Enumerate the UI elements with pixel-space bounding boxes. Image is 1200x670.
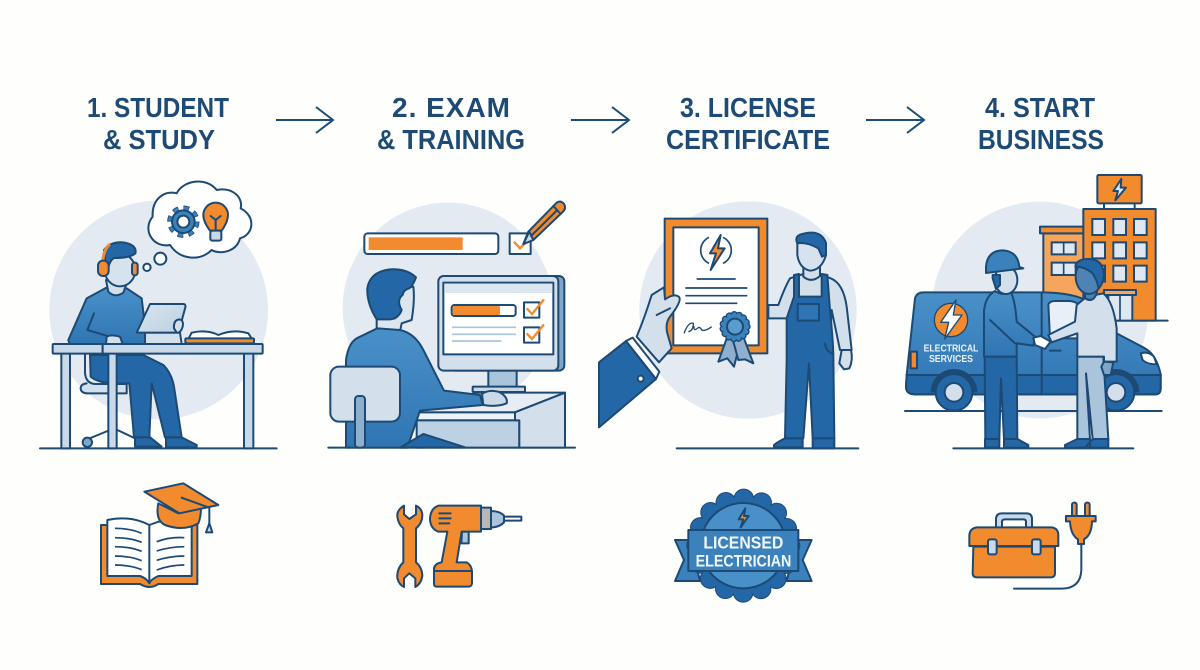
lightbulb icon: [203, 203, 228, 241]
ribbon seal: [718, 315, 753, 367]
van lettering: SERVICES: [929, 354, 973, 365]
handshake: [1033, 336, 1051, 349]
icon: wrench and drill: [397, 506, 521, 587]
chair: [81, 353, 135, 447]
ribbon ends: [675, 540, 812, 581]
hand holding certificate: [599, 287, 680, 427]
thought bubble with gear and lightbulb: [143, 182, 251, 271]
tablet: [137, 304, 185, 344]
certificate: [665, 219, 767, 353]
heading: step 2: 2. EXAM: [392, 92, 510, 123]
heading: step 3: CERTIFICATE: [666, 124, 830, 155]
heading: step 1: & STUDY: [103, 124, 215, 155]
heading: step 4: 4. START: [985, 92, 1095, 123]
computer monitor: [438, 276, 564, 392]
heading: step 4: BUSINESS: [978, 124, 1104, 155]
icon: licensed electrician badge: ELECTRICIAN: [696, 552, 791, 571]
heading: step 3: [666, 92, 830, 155]
gear icon: [170, 208, 197, 235]
progress bar: [364, 233, 498, 254]
scene: license certificate handed to worker: [599, 201, 858, 448]
desk: [417, 393, 565, 448]
torso: [68, 287, 147, 345]
van lettering: ELECTRICAL: [924, 343, 978, 354]
arrow: step 3 to 4: [866, 107, 924, 133]
head and headphones: [98, 242, 138, 295]
heading: step 2: & TRAINING: [377, 124, 525, 155]
van lettering: [924, 343, 978, 365]
heading: step 1: 1. STUDENT: [87, 92, 229, 123]
icon: toolbox with plug: [969, 503, 1096, 589]
legs: [90, 355, 197, 447]
office chair: [330, 367, 400, 448]
heading: step 4: [978, 92, 1104, 155]
scene: exam and training at computer: [328, 202, 575, 448]
icon: book with graduation cap: [101, 483, 218, 587]
office buildings with sign: [1040, 175, 1156, 321]
checkbox with pencil: [510, 202, 565, 254]
heading: step 1: [87, 92, 229, 155]
heading: step 3: 3. LICENSE: [680, 92, 816, 123]
customer: [1048, 259, 1117, 448]
drill: [430, 506, 521, 587]
person seen from behind: [346, 269, 507, 448]
arrow: step 1 to 2: [276, 107, 333, 133]
icon: licensed electrician badge: [675, 497, 812, 594]
heading: step 2: [377, 92, 525, 155]
service van: [906, 292, 1161, 411]
desk: [53, 335, 263, 448]
electrician: [984, 250, 1035, 448]
wrench: [397, 506, 422, 587]
worker in overalls: [768, 233, 852, 448]
icon: licensed electrician badge: LICENSED: [703, 533, 783, 553]
arrow: step 2 to 3: [571, 107, 629, 133]
scene: start business with van and buildings: [905, 175, 1168, 448]
van logo: [934, 300, 968, 339]
scene: student studying at desk: [40, 182, 277, 448]
open book on desk: [185, 331, 254, 343]
